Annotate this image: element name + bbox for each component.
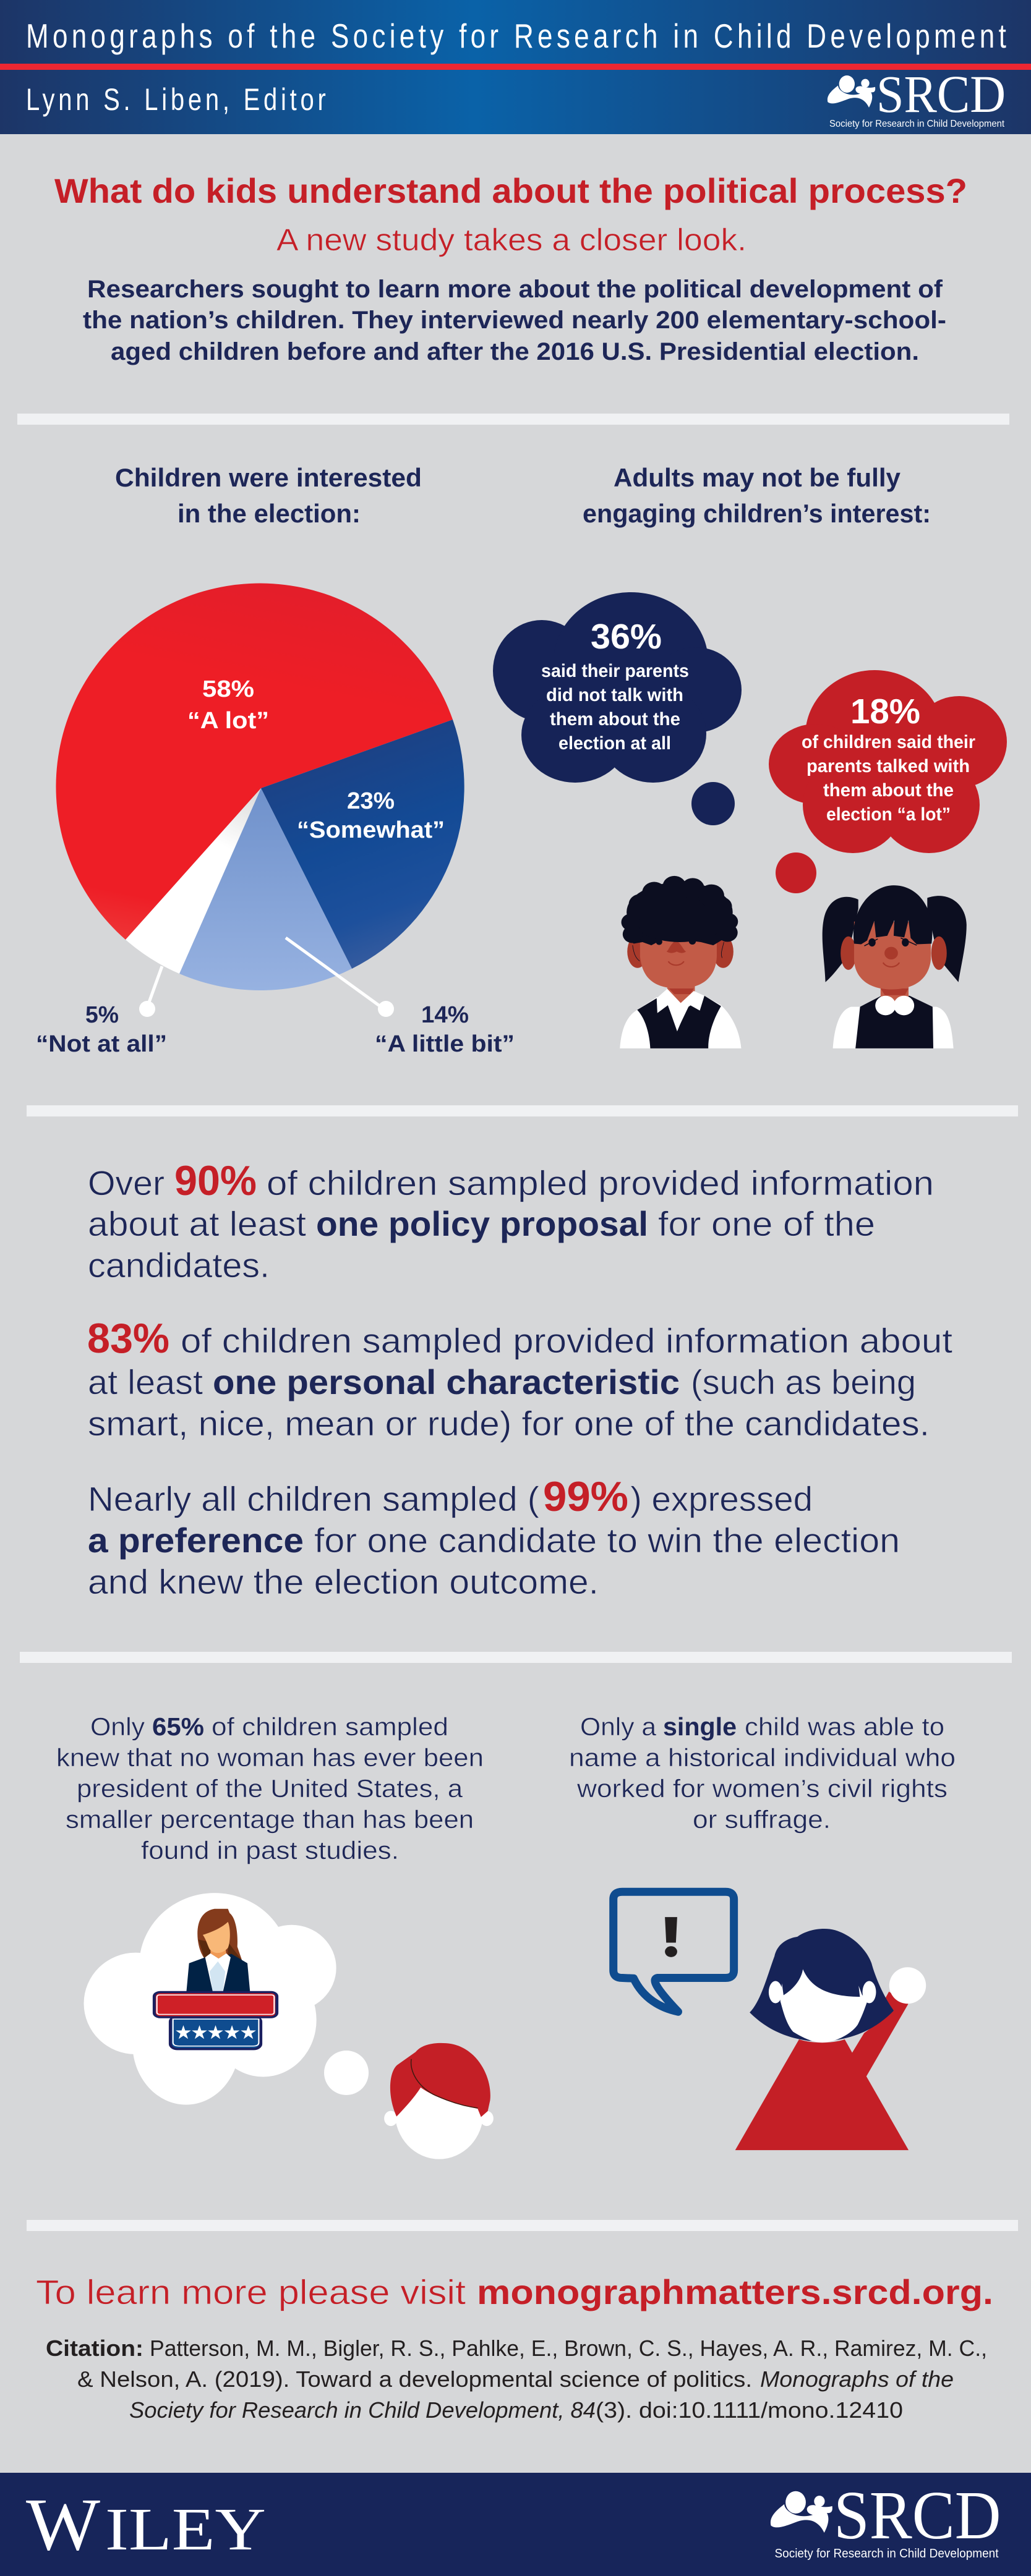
pie chart [56, 584, 464, 990]
chart heading: in the election: [178, 499, 361, 528]
text block: 90% policy proposal: one policy proposal [316, 1204, 648, 1243]
citation: Monographs of the [760, 2366, 954, 2392]
Wiley logo: W [26, 2483, 100, 2566]
thought dot: red [776, 852, 816, 893]
thought cloud: candidate at podium [84, 1893, 336, 2105]
text block: 83% personal characteristic: smart, nice, mean or rude) for one of the candidates. [88, 1404, 930, 1443]
main heading: What do kids understand about the political process? [54, 171, 967, 210]
thought cloud: 18%: of children said their [802, 732, 975, 752]
label: 58% a lot: 58% [202, 676, 254, 702]
SRCD logo: SRCD [834, 2478, 1001, 2554]
text block: 90% policy proposal: candidates. [88, 1246, 270, 1285]
panel: historical individual knowledge [569, 1712, 956, 2150]
text block: 65%: knew that no woman has ever been [56, 1743, 484, 1772]
text block: single child [569, 1712, 956, 1834]
label: 23% somewhat: 23% [347, 788, 395, 814]
text block: single child: or suffrage. [693, 1805, 831, 1834]
call to action: website: To learn more please visit [36, 2272, 466, 2311]
thought dot: blue [691, 782, 735, 825]
SRCD logo: Society for Research in Child Development [829, 119, 1005, 129]
icon: child with red hair [384, 2043, 494, 2159]
journal title: Monographs of the Society for Research in Child Development [26, 17, 1006, 55]
text block: single child: worked for women’s civil rights [576, 1774, 948, 1803]
thought cloud: 36%: them about the [550, 709, 680, 729]
label: 58% a lot [187, 676, 269, 734]
text block: 90% policy proposal: of children sampled provided information [267, 1163, 934, 1202]
thought cloud: 18%: parents talked with [806, 756, 970, 776]
intro paragraph: the nation’s children. They interviewed nearly 200 elementary-school- [83, 307, 946, 334]
Wiley logo [26, 2483, 266, 2566]
text block: 90% policy proposal [88, 1157, 934, 1285]
label: 23% somewhat [297, 788, 445, 843]
thought cloud: 18%: them about the [823, 780, 954, 801]
citation: (3). doi:10.1111/mono.12410 [596, 2397, 903, 2423]
label: 14% a little bit: 14% [421, 1002, 469, 1028]
text block: 99% preference [88, 1473, 900, 1601]
text block: 83% personal characteristic: at least [88, 1362, 203, 1401]
text block: 99% preference: a preference [88, 1521, 304, 1560]
text block: 99% preference: 99% [543, 1473, 628, 1520]
label: 14% a little bit [375, 1002, 515, 1057]
thought cloud: 36%: said their parents [541, 661, 689, 681]
thought cloud: 18%: 18% [850, 692, 920, 731]
icon: girl [823, 885, 967, 1048]
chart heading [115, 463, 422, 528]
citation: Citation: [46, 2336, 143, 2361]
text block: 90% policy proposal: for one of the [658, 1204, 875, 1243]
label: 5% not at all: “Not at all” [36, 1031, 167, 1057]
text block: single child: Only a [580, 1712, 656, 1741]
text block: 90% policy proposal: 90% [174, 1157, 257, 1204]
text block: 65%: president of the United States, a [77, 1774, 463, 1803]
text block: 99% preference: and knew the election outcome. [88, 1562, 599, 1601]
text block: single child: name a historical individual who [569, 1743, 956, 1772]
thought cloud: 18%: election “a lot” [826, 804, 951, 825]
citation: & Nelson, A. (2019). Toward a developmental science of politics. [77, 2366, 752, 2392]
icon: girl raising hand [735, 1929, 926, 2150]
call to action: website: monographmatters.srcd.org. [477, 2272, 993, 2311]
leader: not at all [139, 966, 162, 1017]
intro paragraph: Researchers sought to learn more about the political development of [87, 276, 943, 303]
citation: Patterson, M. M., Bigler, R. S., Pahlke, E., Brown, C. S., Hayes, A. R., Ramirez, M. C., [150, 2336, 987, 2361]
text block: 65%: 65% [152, 1712, 204, 1741]
icon: speech bubble with exclamation [614, 1892, 734, 2012]
chart heading: Children were interested [115, 463, 422, 492]
label: 23% somewhat: “Somewhat” [297, 817, 445, 843]
thought cloud: 36%: election at all [558, 733, 671, 754]
text block: 83% personal characteristic: one personal characteristic [213, 1362, 680, 1401]
panel heading: engaging children’s interest: [583, 499, 931, 528]
thought cloud: 18% [769, 670, 1007, 853]
text block: 65%: found in past studies. [141, 1836, 399, 1864]
footer banner [0, 2473, 1031, 2576]
citation [46, 2336, 987, 2423]
text block: 65%: of children sampled [212, 1712, 448, 1741]
subheading: A new study takes a closer look. [276, 223, 747, 257]
text block: single child: child was able to [745, 1712, 944, 1741]
text block: 83% personal characteristic: 83% [87, 1315, 169, 1362]
panel: adults engaging children [493, 463, 1007, 1048]
intro paragraph [83, 276, 946, 365]
text block: 83% personal characteristic: of children sampled provided information about [181, 1321, 952, 1360]
panel: woman president knowledge [56, 1712, 494, 2159]
text block: 83% personal characteristic: (such as being [691, 1362, 916, 1401]
thought cloud: 36%: 36% [591, 617, 662, 657]
text block: 65% [56, 1712, 484, 1864]
text block: 90% policy proposal: about at least [88, 1204, 306, 1243]
Wiley logo: ILEY [105, 2496, 266, 2563]
text block: 99% preference: ) expressed [630, 1479, 813, 1518]
SRCD logo: Society for Research in Child Development [774, 2546, 999, 2561]
label: 5% not at all: 5% [85, 1002, 119, 1028]
label: 5% not at all [36, 1002, 167, 1057]
label: 58% a lot: “A lot” [187, 708, 269, 734]
text block: 65%: smaller percentage than has been [66, 1805, 474, 1834]
text block: 99% preference: Nearly all children sampled ( [88, 1479, 539, 1518]
icon: boy [620, 876, 741, 1048]
panel heading: Adults may not be fully [614, 463, 901, 492]
text block: 99% preference: for one candidate to win the election [314, 1521, 900, 1560]
SRCD logo [828, 64, 1006, 129]
citation: Society for Research in Child Development, 84 [129, 2397, 596, 2423]
text block: 90% policy proposal: Over [88, 1163, 165, 1202]
editor name: Lynn S. Liben, Editor [26, 82, 326, 117]
label: 14% a little bit: “A little bit” [375, 1031, 515, 1057]
call to action: website [36, 2272, 993, 2311]
panel heading [583, 463, 931, 528]
SRCD logo: SRCD [876, 64, 1006, 124]
header banner [0, 0, 1031, 134]
panel: children's interest pie chart [36, 463, 515, 1057]
thought cloud: 36% [493, 592, 742, 783]
text block: 83% personal characteristic [87, 1315, 952, 1443]
text block: 65%: Only [90, 1712, 145, 1741]
thought cloud: 36%: did not talk with [546, 685, 683, 705]
text block: single child: single [663, 1712, 737, 1741]
leader: a little bit [286, 938, 394, 1017]
intro paragraph: aged children before and after the 2016 U.S. Presidential election. [111, 338, 919, 365]
SRCD logo [771, 2478, 1001, 2561]
thought dot: white [324, 2051, 369, 2095]
